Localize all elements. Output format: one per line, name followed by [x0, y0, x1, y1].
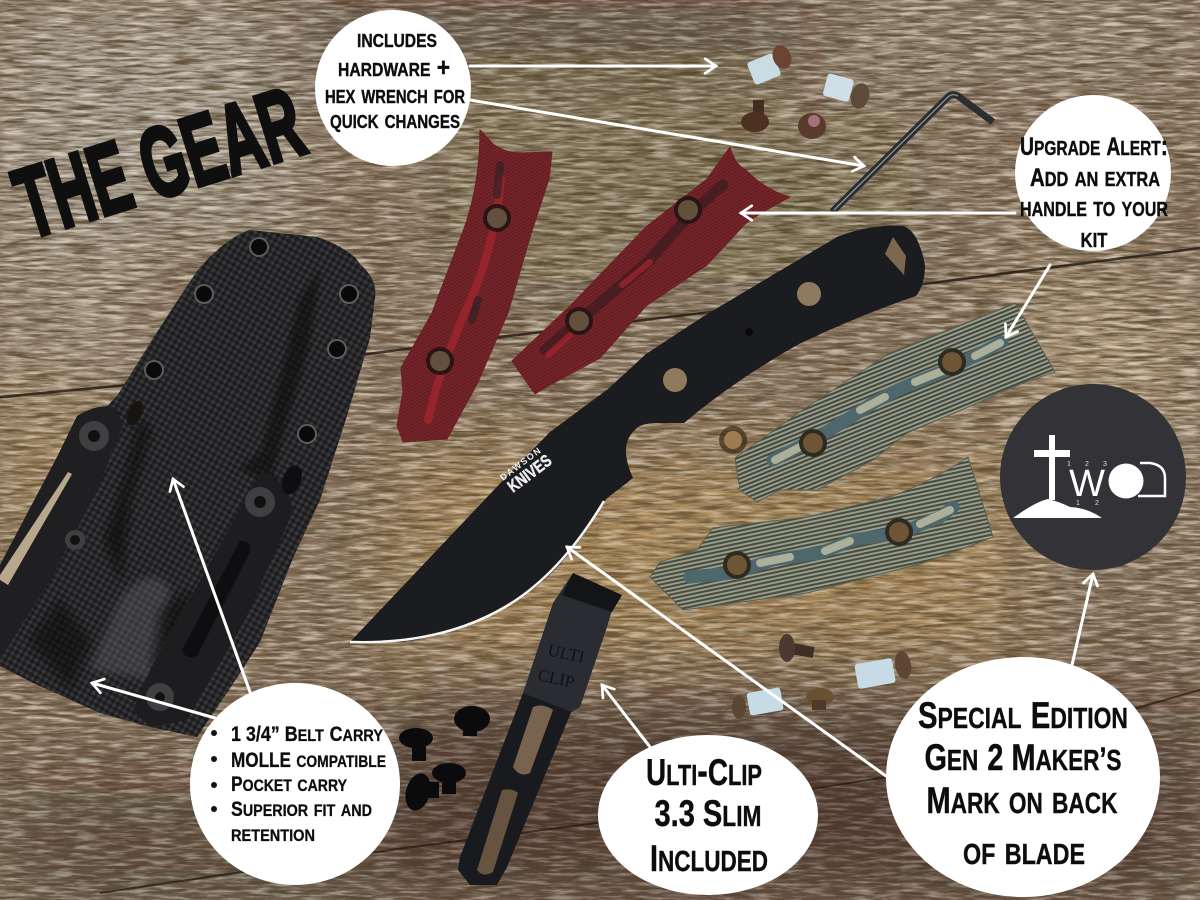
ulti-clip: ULTI	[546, 640, 587, 667]
callout: sheath features: 1 3/4” Belt Carry	[231, 720, 384, 747]
green handle top	[735, 303, 1055, 502]
callout: maker's mark: Special Edition	[918, 690, 1128, 737]
callout: hardware	[315, 10, 471, 166]
title: THE GEAR	[2, 66, 316, 259]
logo badge: 1	[1076, 500, 1080, 507]
callout: ulti-clip: 3.3 Slim	[654, 788, 762, 835]
logo badge: 2	[1095, 500, 1099, 507]
callout: upgrade alert	[1015, 95, 1171, 253]
logo badge: 2	[1085, 461, 1089, 468]
callout: sheath features: retention	[231, 820, 315, 847]
logo badge: W	[1069, 463, 1105, 505]
ulti-clip: CLIP	[536, 665, 576, 692]
callout: hardware: quick changes	[330, 104, 460, 134]
callout: sheath features	[190, 683, 400, 885]
green handle bottom	[650, 457, 993, 610]
sheath	[0, 230, 375, 737]
callout: maker's mark	[886, 657, 1160, 897]
hex wrench	[832, 95, 993, 212]
callout: sheath features: Pocket carry	[231, 770, 348, 797]
hardware: top screws	[741, 43, 872, 139]
callout: ulti-clip: Ulti-Clip	[646, 747, 762, 794]
callout: sheath features: MOLLE compatible	[231, 746, 386, 773]
red handle left	[397, 130, 552, 442]
red handle right	[512, 147, 790, 394]
callout: upgrade alert: Add an extra	[1030, 161, 1160, 192]
knife: KNIVES	[504, 451, 555, 496]
logo badge: 1	[1067, 461, 1071, 468]
logo badge: 3	[1103, 461, 1107, 468]
callout: maker's mark: of blade	[963, 826, 1085, 873]
callout: hardware: hex wrench for	[325, 79, 465, 109]
callout: hardware: includes	[357, 23, 437, 53]
callout: upgrade alert: Upgrade Alert:	[1020, 130, 1168, 161]
knife	[350, 226, 925, 642]
callout: hardware: hardware +	[338, 52, 450, 82]
logo badge	[1000, 384, 1186, 570]
hardware: black screws	[399, 706, 490, 813]
callout: ulti-clip	[598, 735, 818, 895]
callout: sheath features: Superior fit and	[231, 795, 372, 822]
callout: maker's mark: Mark on back	[926, 775, 1118, 822]
callout: ulti-clip: Included	[650, 833, 768, 880]
callout: upgrade alert: handle to your	[1020, 191, 1168, 222]
callout: maker's mark: Gen 2 Maker’s	[924, 732, 1122, 779]
arrows	[92, 66, 1093, 776]
hardware: lower screws	[732, 634, 913, 719]
ulti-clip	[458, 573, 622, 885]
knife: DAWSON	[498, 446, 543, 483]
callout: upgrade alert: kit	[1080, 222, 1108, 253]
knot	[719, 426, 747, 454]
